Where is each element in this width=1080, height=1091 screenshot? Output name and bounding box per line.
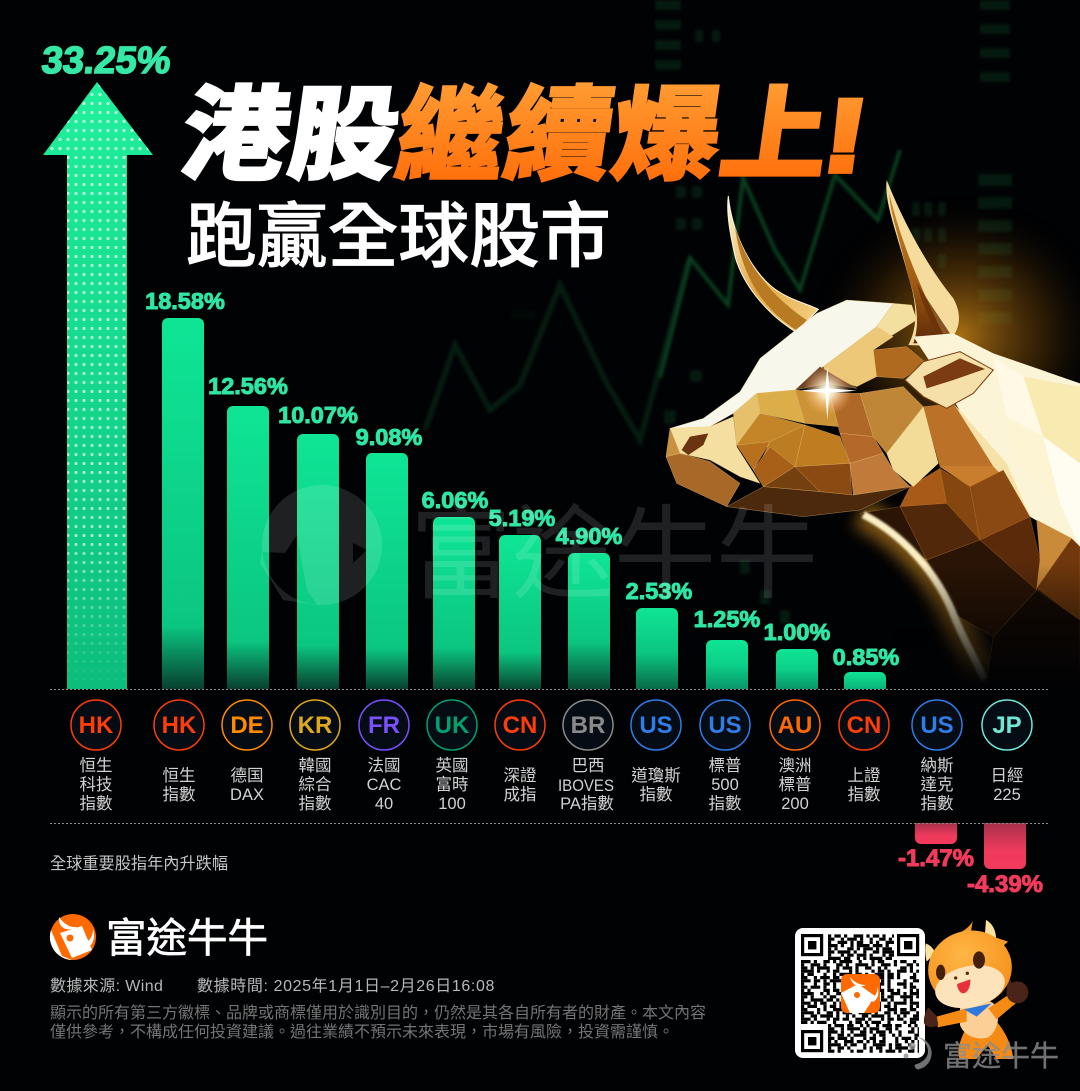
index names: DAX xyxy=(230,786,264,804)
index names: 指數 xyxy=(848,785,880,804)
index names: 達克 xyxy=(920,775,954,794)
index names: 指數 xyxy=(920,794,954,813)
corner watermark xyxy=(904,1037,1059,1073)
bull head facets xyxy=(666,300,938,517)
hero arrow xyxy=(43,82,153,689)
value labels: 10.07% xyxy=(278,402,358,428)
index names: 指數 xyxy=(80,794,112,813)
eyes xyxy=(973,951,985,969)
value labels: 12.56% xyxy=(208,373,288,399)
chart caption: 全球重要股指年內升跌幅 xyxy=(50,855,228,873)
index names: 綜合 xyxy=(298,775,332,794)
region codes: AU xyxy=(778,712,812,739)
value labels: 18.58% xyxy=(145,288,225,314)
disclaimer xyxy=(50,1003,706,1041)
region codes: HK xyxy=(162,712,197,739)
subtitle: 跑贏全球股市 xyxy=(186,198,611,277)
corner watermark: 富途牛牛 xyxy=(943,1040,1059,1073)
horn: left xyxy=(728,196,818,332)
neck rim glow xyxy=(860,513,985,680)
mascot: orange calf xyxy=(921,920,1028,1059)
icon: QR center logo xyxy=(841,974,880,1013)
index names: PA指數 xyxy=(560,794,614,813)
nostrils xyxy=(954,976,957,980)
scarf xyxy=(964,1003,992,1017)
neck rim edge xyxy=(863,515,984,680)
index names: 日經 xyxy=(990,766,1024,785)
ears xyxy=(955,921,973,938)
negative bars xyxy=(915,823,1026,869)
index names: 英國 xyxy=(436,756,468,775)
index names: 標普 xyxy=(708,756,742,775)
data source: 數據時間: 2025年1月1日–2月26日16:08 xyxy=(197,977,495,995)
index names: 指數 xyxy=(162,785,196,804)
value labels: 0.85% xyxy=(833,644,899,670)
region codes: BR xyxy=(571,712,605,739)
muzzle xyxy=(931,959,1009,1014)
bull body xyxy=(913,333,1080,547)
index names: 標普 xyxy=(778,775,812,794)
index names: 深證 xyxy=(504,766,537,785)
index names xyxy=(80,756,1024,813)
index names: 科技 xyxy=(80,775,112,794)
value labels: 5.19% xyxy=(489,505,555,531)
region codes: UK xyxy=(435,712,470,739)
title: ! xyxy=(817,79,874,193)
index names: 指數 xyxy=(640,785,672,804)
index names: 韓國 xyxy=(298,756,332,775)
index names: 恒生 xyxy=(80,756,112,775)
head xyxy=(921,923,1019,1015)
value labels: 4.90% xyxy=(556,523,622,549)
icon: futu logo xyxy=(50,914,96,960)
arrow value: 33.25% xyxy=(40,40,173,82)
region codes: FR xyxy=(368,712,400,739)
value labels: 1.00% xyxy=(764,619,830,645)
index names: 225 xyxy=(993,786,1021,804)
value labels: -1.47% xyxy=(898,845,974,872)
index names: 上證 xyxy=(848,766,881,785)
eye sparkle xyxy=(800,366,857,420)
region codes: US xyxy=(920,712,954,739)
index names: 40 xyxy=(375,795,393,813)
index names: 500 xyxy=(711,776,739,794)
index names: 澳洲 xyxy=(778,756,812,775)
below-baseline mask xyxy=(893,688,1080,728)
horns xyxy=(925,943,935,962)
data source xyxy=(50,977,495,995)
region codes: US xyxy=(639,712,673,739)
baseline divider xyxy=(50,688,1050,690)
torso xyxy=(960,1000,998,1038)
region codes: KR xyxy=(298,712,332,739)
value labels: 9.08% xyxy=(356,424,422,450)
disclaimer: 僅供參考，不構成任何投資建議。過往業績不預示未來表現，市場有風險，投資需謹慎。 xyxy=(50,1022,674,1041)
value labels: -4.39% xyxy=(967,871,1043,898)
index names: 恒生 xyxy=(162,766,196,785)
region codes xyxy=(79,712,1022,739)
title: 繼續爆上 xyxy=(389,79,837,193)
data source: 數據來源: Wind xyxy=(50,977,163,995)
index names: 指數 xyxy=(298,794,332,813)
nostril xyxy=(682,433,708,455)
QR code xyxy=(795,928,925,1058)
value labels: 1.25% xyxy=(694,606,760,632)
bull neck facets xyxy=(860,403,1080,683)
region codes: CN xyxy=(847,712,881,739)
mouth xyxy=(957,979,970,993)
index names: 法國 xyxy=(368,756,400,775)
watermark: 富途牛牛 xyxy=(410,498,818,612)
brand name: 富途牛牛 xyxy=(106,915,268,961)
title xyxy=(174,79,874,193)
watermark xyxy=(260,485,818,612)
index names: IBOVES xyxy=(558,777,614,795)
value labels: 2.53% xyxy=(626,578,692,604)
index names: 道瓊斯 xyxy=(631,766,681,785)
region codes: JP xyxy=(992,712,1022,739)
bull glow xyxy=(810,195,1080,475)
arm left xyxy=(924,1007,967,1027)
finder marks xyxy=(803,936,918,1051)
region badges xyxy=(71,700,1032,750)
index names: 200 xyxy=(781,795,809,813)
index names: CAC xyxy=(367,776,401,794)
background market chart xyxy=(425,0,1012,624)
index names: 納斯 xyxy=(920,756,954,775)
brand logo xyxy=(50,914,268,961)
region codes: DE xyxy=(230,712,264,739)
index names: 成指 xyxy=(504,785,536,804)
index names: 100 xyxy=(438,795,466,813)
index names: 德国 xyxy=(230,766,264,785)
title: 港股 xyxy=(174,79,406,193)
region codes: US xyxy=(708,712,742,739)
region codes: CN xyxy=(503,712,537,739)
legs xyxy=(958,1020,1013,1059)
positive bars xyxy=(162,318,886,689)
index names: 巴西 xyxy=(572,757,604,775)
ear xyxy=(905,352,993,408)
bar chart xyxy=(145,288,1043,898)
region codes: HK xyxy=(79,712,114,739)
illustration: golden low-poly bull xyxy=(666,180,1080,728)
index names: 富時 xyxy=(436,775,468,794)
index names: 指數 xyxy=(708,794,742,813)
arm right xyxy=(988,980,1028,1019)
value labels xyxy=(145,288,1043,898)
disclaimer: 顯示的所有第三方徽標、品牌或商標僅用於識別目的，仍然是其各自所有者的財產。本文內容 xyxy=(50,1003,706,1022)
horn: right xyxy=(886,180,959,345)
value labels: 6.06% xyxy=(422,487,488,513)
bottom fade xyxy=(893,563,1080,688)
